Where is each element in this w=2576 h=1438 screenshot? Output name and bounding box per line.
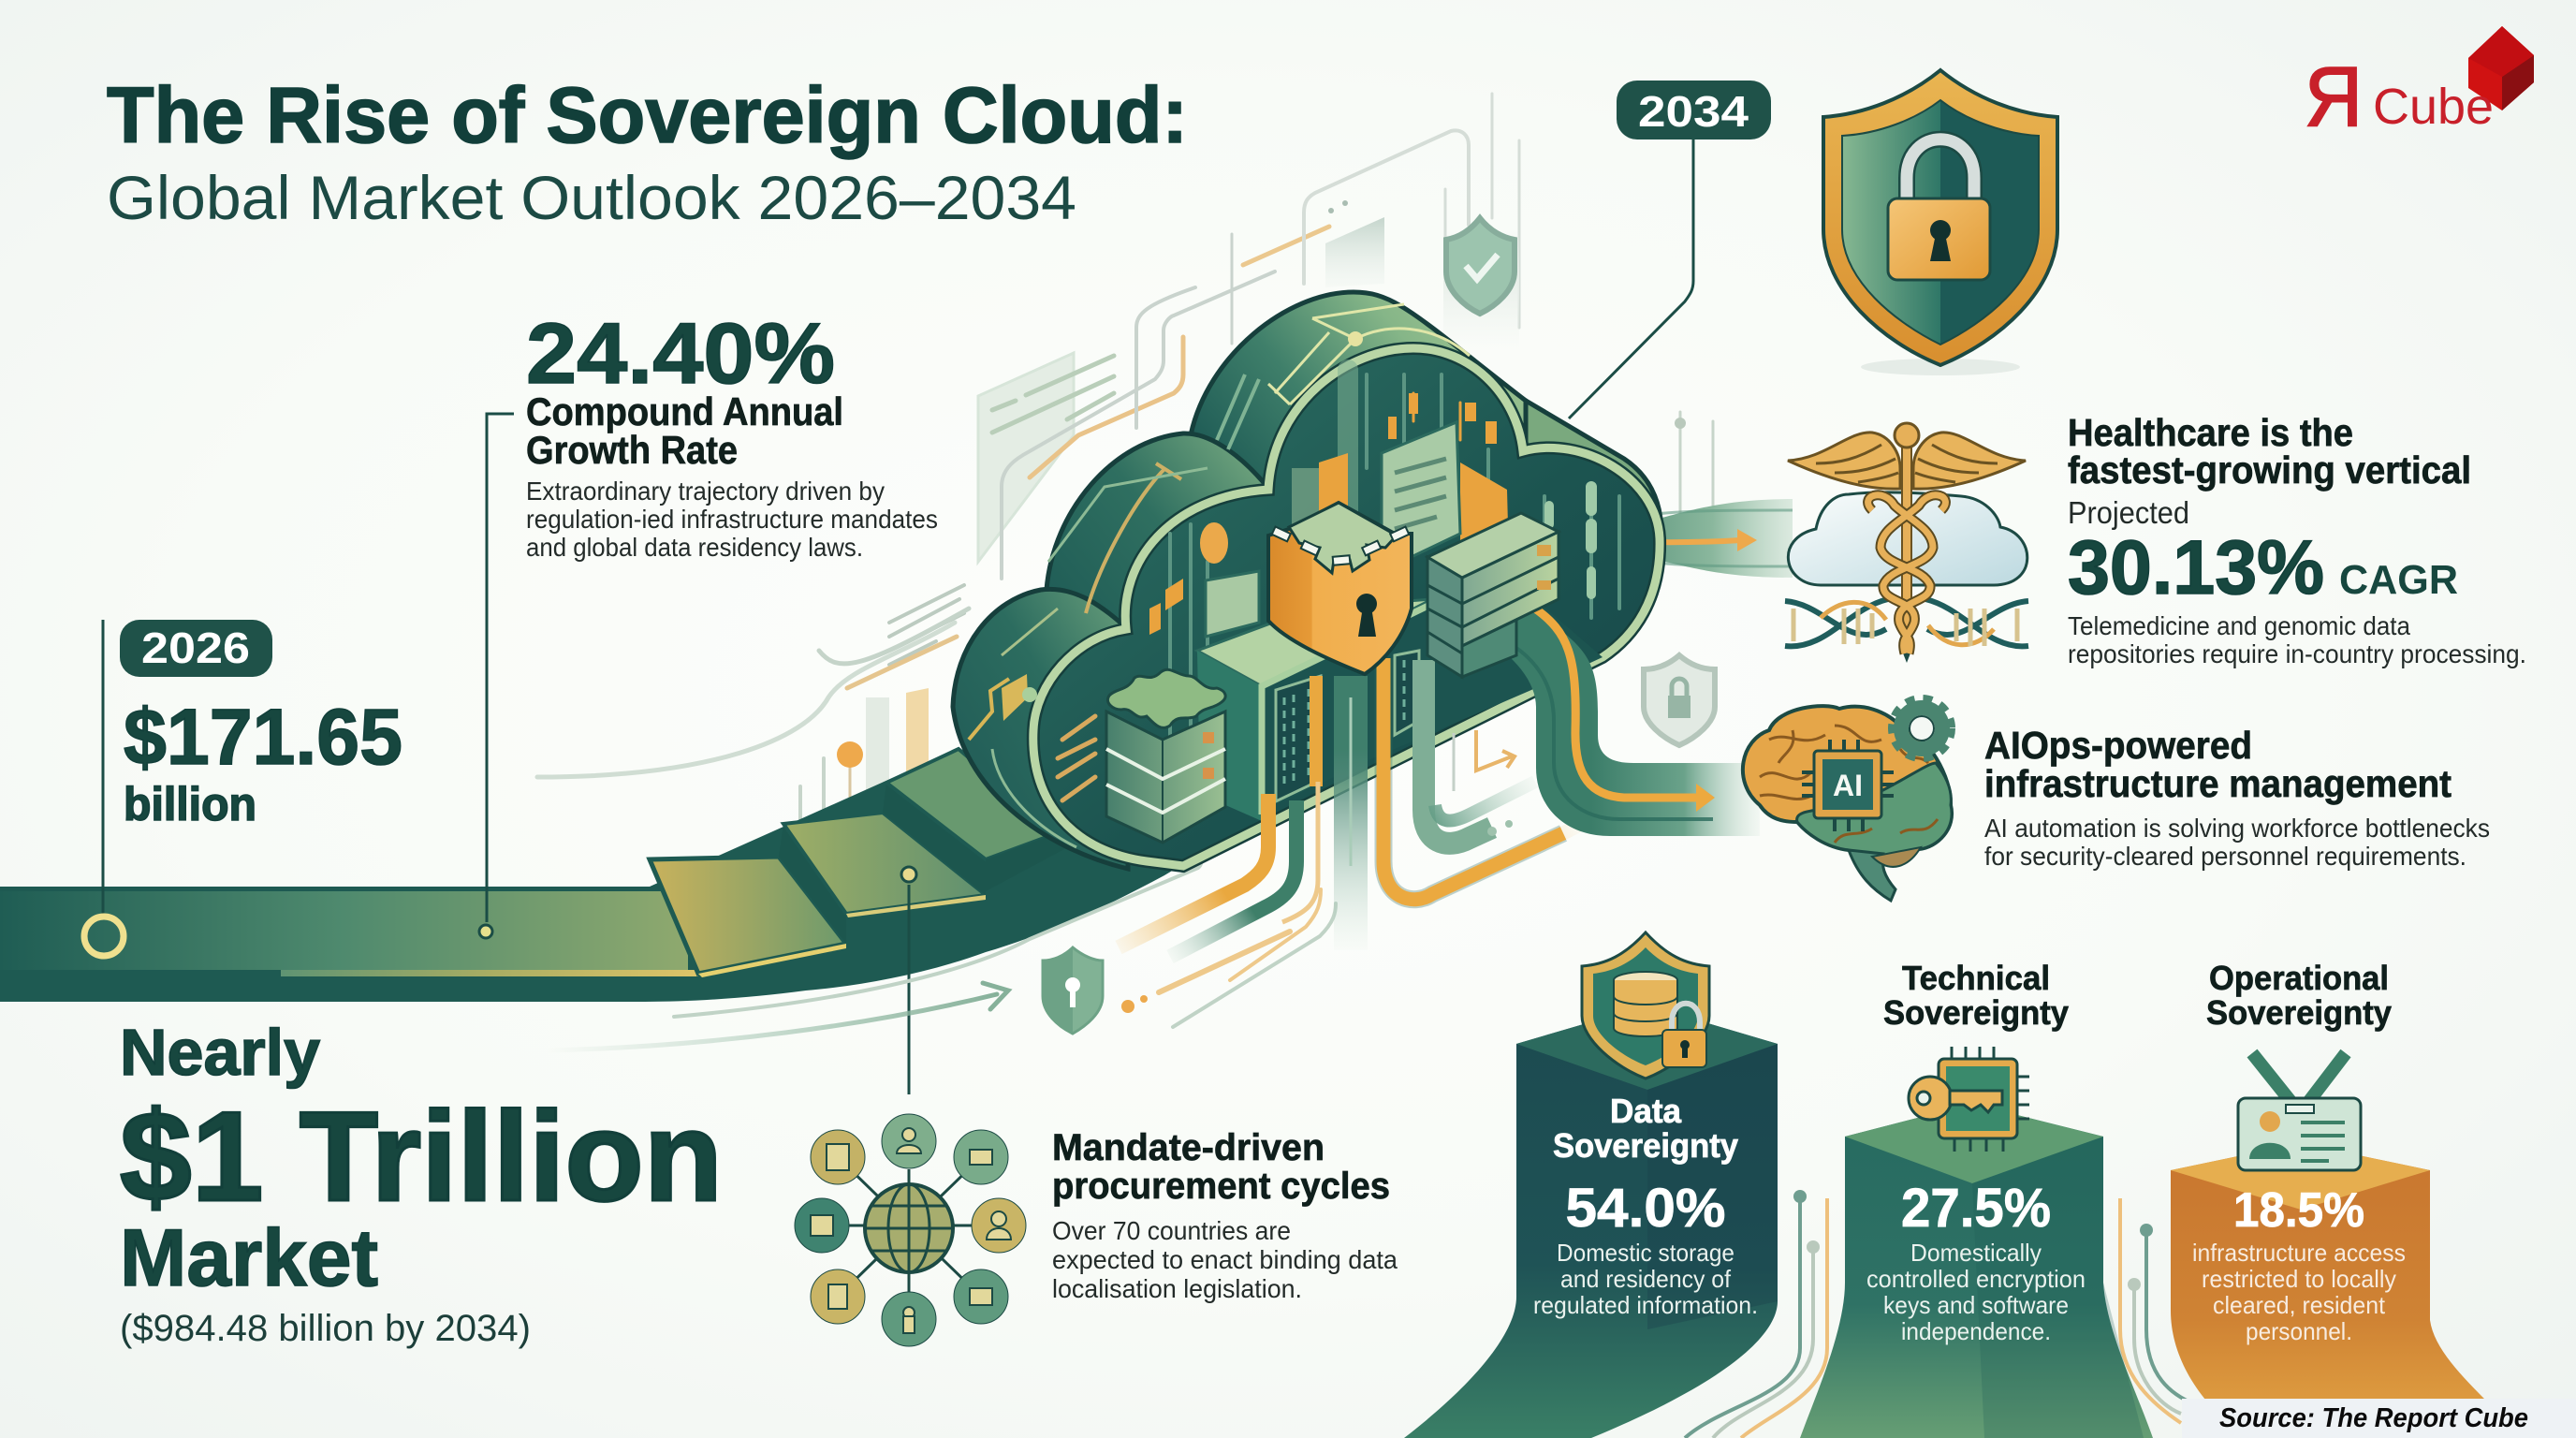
CAGR stat: Growth Rate — [526, 428, 738, 472]
icon: globe network — [795, 1114, 1026, 1346]
AIOps text: AIOps-powered — [1984, 724, 2252, 767]
healthcare text: 30.13% — [2068, 525, 2324, 610]
right lobe shell — [1498, 398, 1661, 657]
market total stat — [120, 1016, 723, 1349]
panel: technical sovereignty — [1800, 959, 2153, 1438]
orange data boxes — [1319, 453, 1348, 580]
orange castle shield with keyhole — [1268, 503, 1412, 674]
timeline marker: CAGR connector — [479, 414, 514, 938]
procurement text — [1052, 1127, 1398, 1303]
timeline marker: procurement connector — [901, 867, 916, 1094]
icon: shield with database — [1582, 932, 1709, 1078]
decorative circuitry behind the cloud — [537, 94, 1713, 857]
central isometric cloud illustration — [953, 292, 1760, 957]
icon: ID badge — [2238, 1053, 2361, 1170]
panel: operational sovereignty: cleared, resident — [2213, 1291, 2386, 1319]
panel: technical sovereignty: controlled encryption — [1866, 1265, 2086, 1293]
market growth band with stairs — [0, 599, 1603, 1002]
AIOps text — [1984, 724, 2490, 871]
panel: operational sovereignty — [2171, 959, 2490, 1438]
panel: technical sovereignty: 27.5% — [1901, 1178, 2051, 1239]
AIOps text: infrastructure management — [1984, 762, 2452, 805]
healthcare text: Healthcare is the — [2068, 411, 2353, 454]
title heading — [107, 71, 1188, 232]
swoosh arrows under band — [547, 854, 1336, 1050]
icon: large shield with padlock — [1823, 70, 2057, 375]
left lobe shell — [953, 589, 1128, 869]
healthcare text: repositories require in-country processing. — [2068, 639, 2526, 668]
market total stat: ($984.48 billion by 2034) — [120, 1308, 531, 1349]
procurement text: Over 70 countries are — [1052, 1216, 1291, 1245]
2026 stat — [120, 620, 402, 830]
panel: operational sovereignty: personnel. — [2246, 1317, 2352, 1345]
top lobe shell — [1191, 292, 1526, 496]
panel: technical sovereignty: independence. — [1901, 1317, 2051, 1345]
panel: technical sovereignty: keys and software — [1883, 1291, 2069, 1319]
icon: AI brain with gear — [1743, 698, 1952, 901]
panel: operational sovereignty: restricted to locally — [2202, 1265, 2396, 1293]
panel: data sovereignty: 54.0% — [1565, 1178, 1726, 1239]
panel: data sovereignty: Data — [1610, 1092, 1682, 1130]
panel: data sovereignty: and residency of — [1560, 1265, 1732, 1293]
healthcare data stream — [1591, 499, 1793, 578]
connector from 2034 to the cloud — [1569, 139, 1693, 418]
cloud front opening — [1033, 348, 1660, 866]
market total stat: $1 Trillion — [120, 1085, 723, 1227]
logo: Cube wordmark: Cube — [2373, 79, 2494, 135]
pipes leaving the cloud — [1119, 658, 1582, 957]
2026 stat: $171.65 — [124, 693, 402, 781]
procurement text: localisation legislation. — [1052, 1274, 1302, 1303]
2034 pill: 2034 — [1638, 87, 1749, 136]
2034 pill — [1617, 81, 1771, 139]
CAGR stat — [526, 306, 938, 562]
market total stat: Nearly — [120, 1016, 320, 1089]
procurement text: expected to enact binding data — [1052, 1245, 1398, 1274]
healthcare text: fastest-growing vertical — [2068, 448, 2471, 492]
CAGR stat: Compound Annual — [526, 389, 843, 433]
middle lobe shell — [1046, 433, 1271, 655]
AIOps text: AI automation is solving workforce bottlenecks — [1984, 814, 2490, 843]
center block — [1197, 599, 1603, 821]
panel: data sovereignty — [1404, 932, 1778, 1438]
left server stack — [1106, 669, 1225, 843]
icon: faded lock shield — [1644, 655, 1715, 745]
orange dot marker near stairs — [837, 741, 863, 847]
panel: operational sovereignty: infrastructure access — [2192, 1239, 2406, 1267]
icon: AI brain with gear: AI — [1833, 769, 1863, 802]
document panel — [1382, 422, 1460, 571]
AIOps text: for security-cleared personnel requirements. — [1984, 842, 2466, 871]
procurement text: procurement cycles — [1052, 1166, 1390, 1207]
title heading: The Rise of Sovereign Cloud: — [107, 71, 1188, 159]
CAGR stat: 24.40% — [526, 306, 835, 402]
CAGR stat: Extraordinary trajectory driven by — [526, 477, 885, 506]
panel: data sovereignty: Sovereignty — [1553, 1126, 1738, 1165]
panel: data sovereignty: Domestic storage — [1557, 1239, 1734, 1267]
panel: technical sovereignty: Technical — [1902, 959, 2050, 997]
healthcare text: Telemedicine and genomic data — [2068, 611, 2410, 640]
market total stat: Market — [120, 1213, 378, 1303]
panel: data sovereignty: regulated information. — [1533, 1291, 1758, 1319]
panel: technical sovereignty: Sovereignty — [1883, 993, 2069, 1032]
panel: technical sovereignty: Domestically — [1910, 1239, 2042, 1267]
procurement text: Mandate-driven — [1052, 1127, 1325, 1168]
CAGR stat: and global data residency laws. — [526, 533, 863, 562]
2026 stat: 2026 — [141, 624, 250, 672]
healthcare text: Projected — [2068, 495, 2189, 530]
panel: operational sovereignty: 18.5% — [2233, 1183, 2364, 1238]
source note — [2182, 1399, 2576, 1438]
AIOps data stream — [1477, 609, 1760, 836]
logo: Cube wordmark: Я — [2305, 51, 2363, 144]
healthcare text: CAGR — [2339, 557, 2458, 603]
2026 stat: billion — [124, 778, 256, 830]
source note: Source: The Report Cube — [2219, 1403, 2528, 1433]
right server stack — [1427, 513, 1559, 677]
shell circuit traces — [969, 304, 1470, 847]
icon: faded check shield — [1446, 218, 1515, 314]
icon: key and chip — [1909, 1047, 2029, 1152]
logo: Cube wordmark — [2305, 26, 2534, 144]
panel: operational sovereignty: Operational — [2209, 959, 2389, 997]
stair tops — [650, 749, 1076, 977]
CAGR stat: regulation-ied infrastructure mandates — [526, 505, 938, 534]
cloud interior data lines — [1058, 370, 1619, 805]
icon: small keyhole shield — [1043, 947, 1103, 1034]
decorative lines between columns — [1685, 1190, 2195, 1438]
healthcare text — [2068, 411, 2526, 668]
panel: operational sovereignty: Sovereignty — [2206, 993, 2392, 1032]
title heading: Global Market Outlook 2026–2034 — [107, 163, 1076, 232]
timeline marker: 2026 ring — [84, 620, 124, 956]
icon: caduceus — [1785, 423, 2028, 663]
